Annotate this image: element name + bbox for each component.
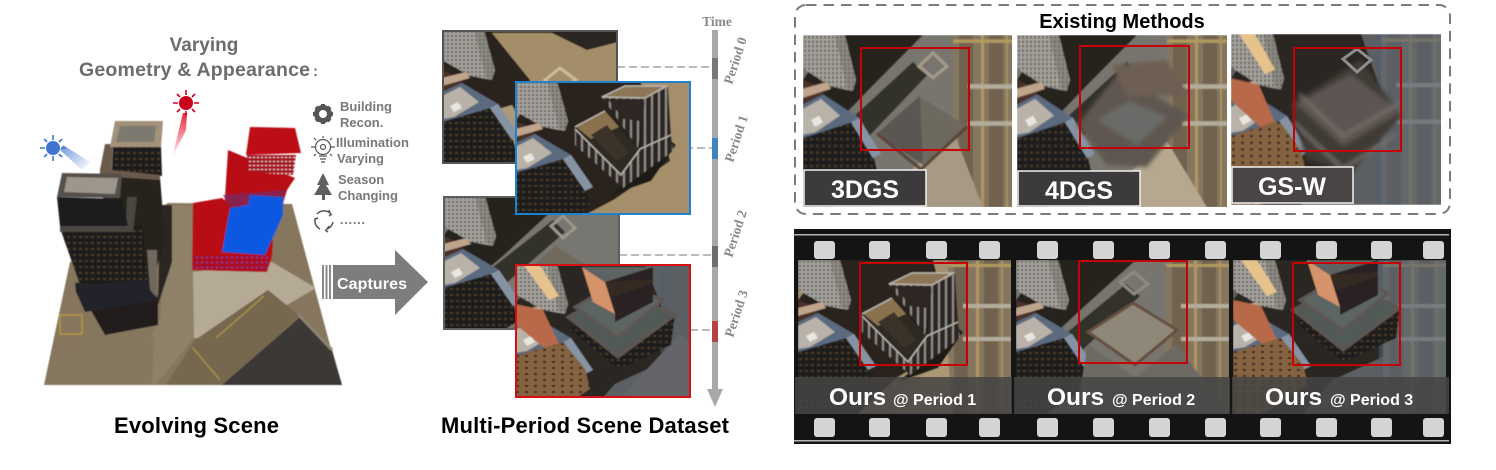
label: 4DGS (1018, 171, 1140, 206)
frame: period 3 (1232, 260, 1449, 414)
title: varying geometry and appearance (79, 35, 318, 81)
arrow: captures: Captures (337, 276, 407, 293)
label: 3DGS: 3DGS (831, 176, 899, 204)
factor list with icons (311, 99, 409, 232)
factor list with icons: Illumination (336, 135, 409, 150)
back tower (100, 121, 165, 290)
label: GS-W: GS-W (1258, 173, 1326, 201)
caption: period 1 (795, 377, 1012, 414)
factor list with icons: Varying (337, 151, 384, 166)
icon: light bulb (311, 136, 335, 162)
result: 4DGS (1017, 35, 1231, 207)
result: GS-W (1231, 34, 1445, 205)
timeline: Period 1 (722, 113, 751, 164)
timeline connector dashes (617, 67, 712, 330)
caption: period 2: @ Period 2 (1112, 392, 1195, 409)
timeline: Period 0 (721, 35, 750, 86)
frame: period 2 (1014, 260, 1230, 414)
ground plane (44, 203, 342, 385)
panel: existing methods: Existing Methods (1039, 11, 1205, 33)
icon: pine tree (314, 173, 332, 200)
caption: period 2: Ours (1047, 384, 1104, 411)
panel: existing methods (795, 5, 1450, 214)
result: 3DGS (803, 35, 1017, 207)
caption: period 3: @ Period 3 (1330, 392, 1413, 409)
icon: blue sun with beam (40, 135, 90, 170)
evolving scene: 3D city block (44, 121, 342, 385)
period markers (712, 58, 718, 342)
film sprocket holes (814, 241, 1444, 437)
factor list with icons: Season (338, 172, 384, 187)
caption: period 3: Ours (1265, 384, 1322, 411)
photo: period 1, blue frame (515, 81, 691, 235)
panel: filmstrip of our results (794, 229, 1451, 444)
caption: period 1: Ours (829, 384, 886, 411)
caption: period 3 (1232, 377, 1449, 414)
factor list with icons: Recon. (340, 115, 383, 130)
caption: period 2 (1014, 377, 1230, 414)
photo: period 0 (442, 30, 618, 184)
caption: period 1: @ Period 1 (893, 392, 976, 409)
timeline: Period 2 (721, 208, 750, 259)
timeline (702, 14, 751, 407)
title: varying geometry and appearance: : (313, 63, 318, 80)
front tower (57, 173, 158, 335)
timeline: Period 3 (722, 288, 751, 339)
point cloud building: red and blue (192, 127, 301, 272)
photo: period 3, red frame (515, 264, 729, 418)
title: varying geometry and appearance: Varying (170, 35, 238, 56)
timeline: Time (702, 14, 732, 29)
photo: period 2 (443, 196, 620, 350)
factor list with icons: Changing (338, 188, 398, 203)
heading: multi-period scene dataset: Multi-Period Scene Dataset (441, 413, 730, 438)
label: 4DGS: 4DGS (1045, 177, 1113, 205)
label: 3DGS (804, 170, 926, 206)
icon: refresh cycle (315, 210, 333, 232)
label: GS-W (1232, 167, 1353, 203)
heading: evolving scene: Evolving Scene (114, 413, 279, 438)
icon: red sun with beam (172, 90, 199, 158)
arrow: captures (322, 250, 428, 315)
factor list with icons: Building (340, 99, 392, 114)
icon: gear (313, 104, 333, 124)
title: varying geometry and appearance: Geometry & Appearance (79, 59, 310, 81)
factor list with icons: ...... (340, 212, 365, 227)
frame: period 1 (795, 260, 1012, 414)
